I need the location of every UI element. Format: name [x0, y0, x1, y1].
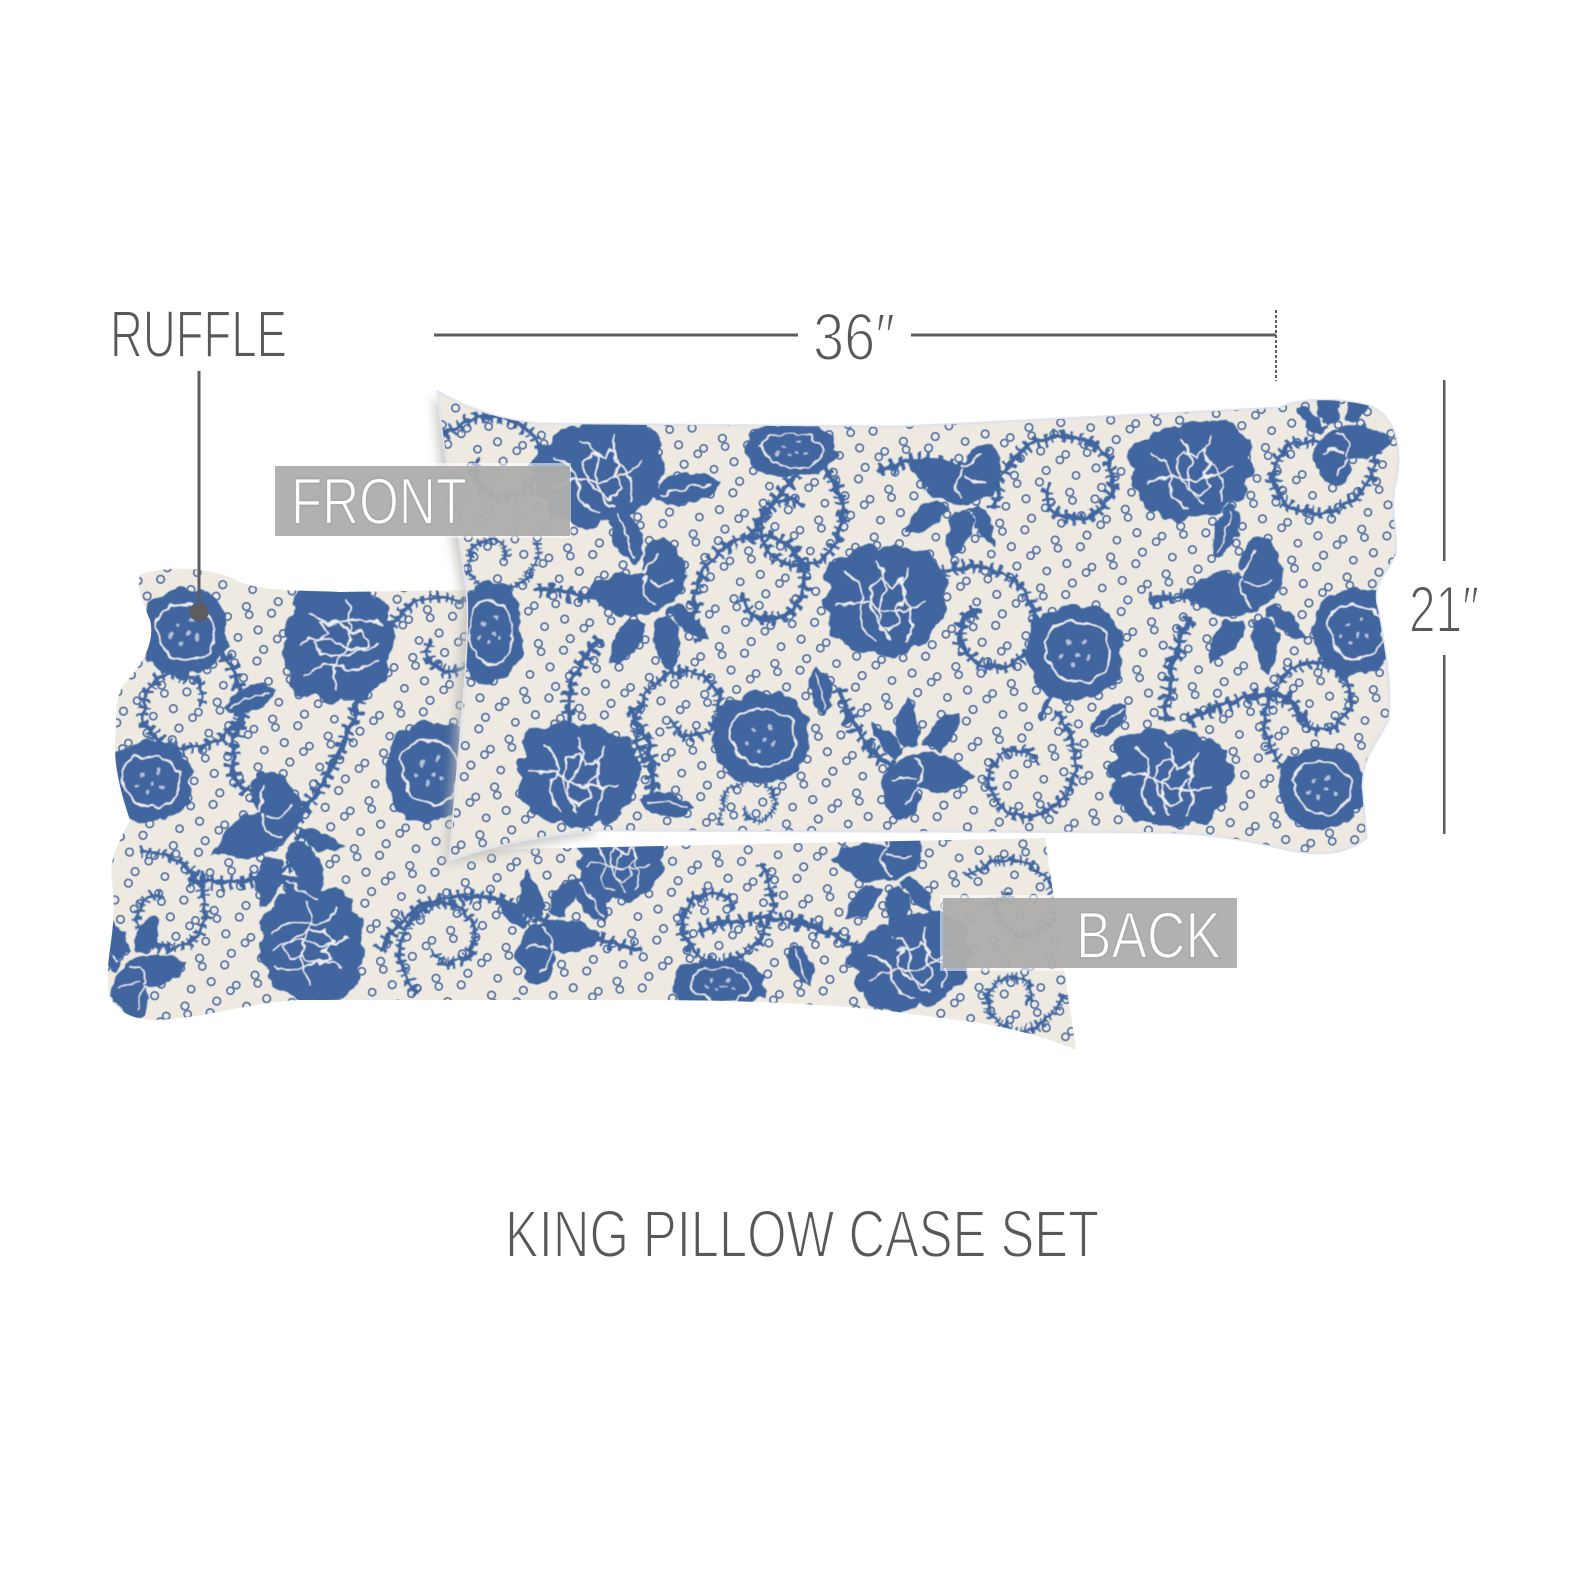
ruffle label: RUFFLE: [110, 297, 287, 372]
label box: front: FRONT: [291, 464, 467, 538]
width dimension: 36 inches: 36″: [813, 300, 895, 375]
panel: front pillow case: [420, 370, 1420, 875]
width dimension: 36 inches: [434, 300, 1276, 381]
ruffle leader line with dot: [190, 371, 208, 622]
label box: back: BACK: [1076, 898, 1221, 972]
caption: KING PILLOW CASE SET: [505, 1197, 1099, 1272]
height dimension: 21 inches: 21″: [1409, 572, 1479, 646]
panel: back pillow case: [108, 568, 1076, 1050]
panel: front pillow shadow: [433, 396, 595, 864]
label box: back: [940, 895, 1239, 972]
